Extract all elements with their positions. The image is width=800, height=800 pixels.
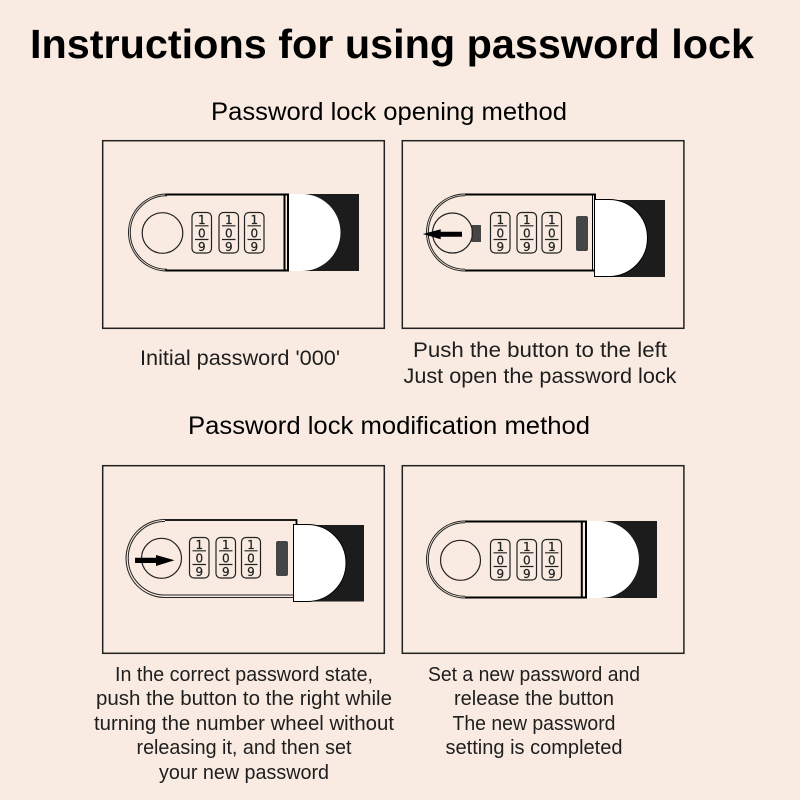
wheel 1 [190,538,209,579]
wheel 2: 1 [225,213,233,227]
panel: set new password [402,466,684,653]
wheel 1: 1 [496,213,504,227]
wheel 2: 9 [225,240,233,254]
lock body [426,194,595,271]
wheel 3: 9 [548,567,556,581]
arrow left [423,229,462,239]
wheel 1: 1 [198,213,206,227]
wheel 3: 1 [548,213,556,227]
wheel 2: 0 [523,553,531,567]
wheel 2: 9 [222,565,230,579]
wheel 3: 0 [250,226,258,240]
button circle [440,540,480,580]
panel: initial lock [103,141,384,328]
heading: opening method: Password lock opening method [211,98,567,126]
wheel 1: 9 [195,565,203,579]
wheel 1: 0 [195,551,203,565]
wheel 1: 9 [198,240,206,254]
wheel 2: 0 [225,226,233,240]
wheel 3: 1 [247,538,255,552]
wheel 3: 9 [250,240,258,254]
caption: push right instructions: releasing it, and then set [136,737,352,759]
wheel 1 [490,540,510,581]
wheel 1: 0 [496,226,504,240]
wheel 3: 9 [548,240,556,254]
wheel 2: 1 [222,538,230,552]
wheel 3 [244,212,264,254]
caption: push right instructions: In the correct password state, [115,664,373,686]
slot [576,216,588,251]
wheel 3: 1 [250,213,258,227]
white latch [594,200,648,276]
slot [276,541,288,576]
white latch [289,194,341,271]
caption: new password instructions [428,664,640,759]
button circle [142,538,182,578]
wheel 2: 9 [523,567,531,581]
white latch [294,524,346,602]
wheel 2: 1 [523,213,531,227]
caption: push left: Just open the password lock [404,365,677,388]
caption: push left [404,339,677,388]
arrow right [135,555,174,566]
caption: push left: Push the button to the left [413,339,667,362]
wheel 1: 9 [496,567,504,581]
caption: push right instructions [94,664,394,784]
wheel 1: 0 [198,226,206,240]
panel: push left [402,141,684,328]
wheel 1: 1 [195,538,203,552]
grey latch tab [472,225,481,242]
wheel 1 [192,212,212,254]
wheel 3 [542,212,562,254]
wheel 3 [242,538,260,579]
wheel 3: 9 [247,565,255,579]
wheel 1: 1 [496,540,504,554]
caption: new password instructions: The new password [452,713,616,735]
lock body [128,194,289,271]
wheel 3: 1 [548,540,556,554]
caption: push right instructions: turning the number wheel without [94,713,394,735]
wheel 2 [216,538,236,579]
wheel 2: 0 [523,226,531,240]
wheel 1: 9 [496,240,504,254]
button circle [142,213,183,253]
wheel 2: 9 [523,240,531,254]
wheel 3 [542,540,562,581]
wheel 3: 0 [548,226,556,240]
wheel 2 [517,540,536,581]
wheel 2 [219,212,238,254]
black back plate [300,194,359,271]
black back plate [610,200,665,277]
panel: push right [103,466,384,653]
caption: push right instructions: your new password [159,762,329,784]
black back plate [310,525,364,602]
heading: modification method: Password lock modification method [188,412,590,440]
caption: new password instructions: Set a new password and [428,664,640,686]
wheel 2 [517,212,536,254]
button circle [432,213,472,253]
wheel 1 [490,212,510,254]
caption: new password instructions: release the button [454,688,614,710]
caption: new password instructions: setting is completed [446,737,622,759]
wheel 3: 0 [548,553,556,567]
white latch [587,521,639,598]
wheel 2: 1 [523,540,531,554]
lock body [426,521,587,598]
wheel 2: 0 [222,551,230,565]
wheel 1: 0 [496,553,504,567]
title: Instructions for using password lock [30,21,754,67]
black back plate [600,521,657,598]
wheel 3: 0 [247,551,255,565]
lock body [126,520,296,598]
caption: initial password: Initial password '000' [140,347,340,370]
caption: push right instructions: push the button to the right while [96,688,392,710]
